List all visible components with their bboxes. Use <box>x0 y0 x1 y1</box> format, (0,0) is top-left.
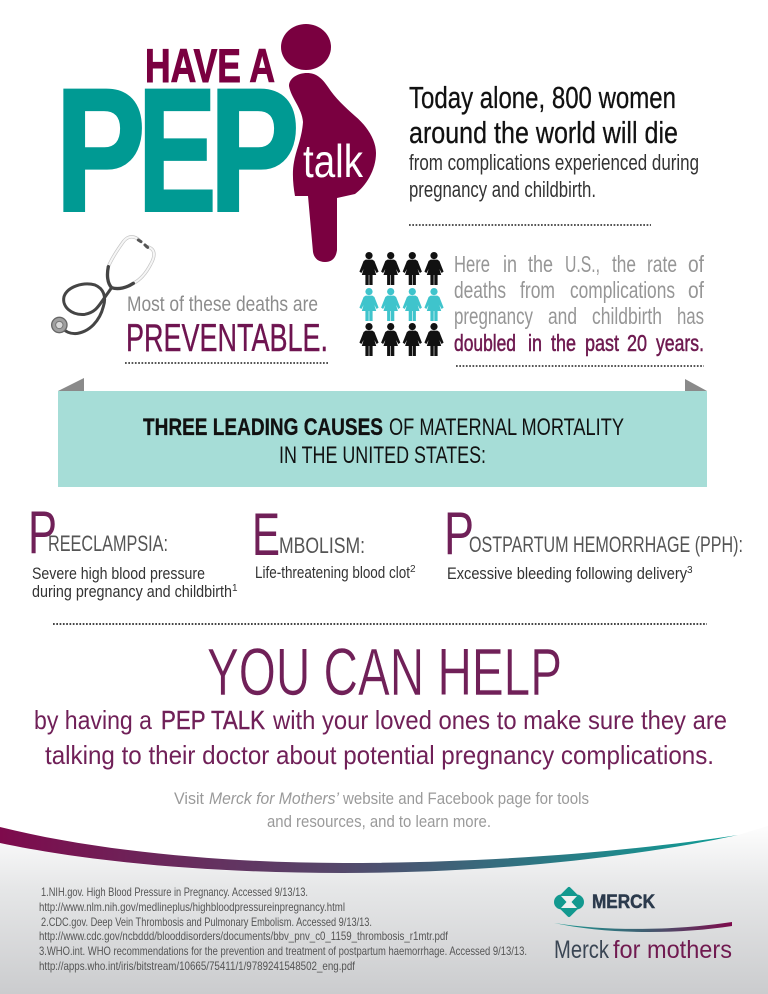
text block: visit merck for mothers: and resources, and to learn more. <box>267 812 491 831</box>
text block: today alone: around the world will die <box>409 115 678 150</box>
logo word: pep: P <box>56 54 145 249</box>
icon: pregnant woman <box>281 24 376 262</box>
cause: preeclampsia: REECLAMPSIA: <box>48 531 168 556</box>
text block: most deaths preventable <box>126 293 328 360</box>
text block: us rate doubled: the <box>551 330 576 356</box>
logo: merck <box>554 889 732 964</box>
text block: us rate doubled: rate <box>647 251 677 277</box>
cause: embolism: MBOLISM: <box>279 533 365 558</box>
logo word: pep: E <box>138 52 216 248</box>
wordmark: merck for mothers: Merck <box>554 936 609 964</box>
text block: us rate doubled: 20 <box>627 330 647 356</box>
text block: pep talk message <box>34 705 727 770</box>
text block: us rate doubled: of <box>688 251 705 277</box>
banner: three leading causes <box>58 378 707 487</box>
cause: postpartum hemorrhage: 3 <box>687 565 693 576</box>
text block: today alone <box>409 80 699 202</box>
text block: us rate doubled: U.S., <box>565 251 600 277</box>
references: 1.NIH.gov. High Blood Pressure in Pregnancy. Accessed 9/13/13. <box>41 885 308 899</box>
text block: most deaths preventable: PREVENTABLE. <box>126 317 328 360</box>
text block: visit merck for mothers: Visit <box>174 789 204 808</box>
text block: us rate doubled: the <box>612 251 636 277</box>
banner heading: OF MATERNAL MORTALITY <box>389 414 624 441</box>
cause: preeclampsia <box>28 499 238 601</box>
text block: us rate doubled: childbirth <box>592 303 662 329</box>
references: http://www.nlm.nih.gov/medlineplus/highbloodpressureinpregnancy.html <box>39 900 345 914</box>
references: 2.CDC.gov. Deep Vein Thrombosis and Pulmonary Embolism. Accessed 9/13/13. <box>41 915 372 929</box>
text block: us rate doubled: past <box>585 330 619 356</box>
logo heading: have a: HAVE A <box>145 39 275 92</box>
icon: merck mark <box>554 889 584 915</box>
text block: pep talk message: PEP TALK <box>161 705 266 735</box>
references <box>39 885 527 973</box>
text block: us rate doubled <box>454 251 705 356</box>
cause: preeclampsia: 1 <box>232 583 238 594</box>
swoosh <box>0 827 738 873</box>
logo word: talk: talk <box>303 135 364 187</box>
logo word: pep <box>56 52 299 249</box>
banner heading: THREE LEADING CAUSES <box>143 414 383 441</box>
text block: us rate doubled: has <box>677 303 704 329</box>
text block: us rate doubled: pregnancy <box>454 303 533 329</box>
wordmark: merck for mothers <box>554 936 732 964</box>
references: 3.WHO.int. WHO recommendations for the prevention and treatment of postpartum haemorrhage. Accessed 9/13/13. <box>39 944 527 958</box>
text block: today alone: Today alone, 800 women <box>409 80 676 115</box>
text block: us rate doubled: in <box>528 330 542 356</box>
cause: postpartum hemorrhage: Excessive bleeding following delivery <box>447 564 687 583</box>
text block: visit merck for mothers: website and Facebook page for tools <box>342 789 589 808</box>
text block: us rate doubled: deaths <box>454 277 506 303</box>
text block: us rate doubled: the <box>528 251 553 277</box>
references: http://www.cdc.gov/ncbddd/blooddisorders/documents/bbv_pnv_c0_1159_thrombosis_r1mtr.pdf <box>39 929 449 943</box>
icon: stethoscope <box>52 237 154 334</box>
references: http://apps.who.int/iris/bitstream/10665/75411/1/9789241548502_eng.pdf <box>39 959 356 973</box>
footer grey background <box>0 826 768 994</box>
cause: postpartum hemorrhage: P <box>444 500 474 567</box>
logo: merck: MERCK <box>592 892 655 913</box>
text block: today alone: pregnancy and childbirth. <box>409 177 596 202</box>
cause: embolism <box>252 501 416 582</box>
text block: most deaths preventable: Most of these deaths are <box>127 293 318 316</box>
text block: pep talk message: with your loved ones to make sure they are <box>272 705 727 735</box>
cause: preeclampsia: P <box>28 499 57 566</box>
text block: us rate doubled: complications <box>570 277 675 303</box>
logo word: pep: P <box>210 54 299 249</box>
text block: us rate doubled: in <box>503 251 517 277</box>
text block: us rate doubled: doubled <box>454 330 516 356</box>
banner heading: IN THE UNITED STATES: <box>279 442 486 469</box>
text block: pep talk message: by having a <box>34 705 152 735</box>
wordmark: merck for mothers: for mothers <box>613 936 732 964</box>
icon grid: twelve women <box>359 252 444 356</box>
merck for mothers swoosh <box>554 922 732 932</box>
text block: pep talk message: talking to their doctor about potential pregnancy complications. <box>45 740 714 770</box>
banner heading <box>143 414 624 469</box>
cause: embolism: E <box>252 501 280 568</box>
cause: embolism: Life-threatening blood clot <box>255 563 410 582</box>
text block: us rate doubled: from <box>520 277 555 303</box>
text block: us rate doubled: of <box>688 277 705 303</box>
text block: visit merck for mothers <box>174 789 589 831</box>
cause: postpartum hemorrhage <box>444 500 743 583</box>
logo: have a pep talk <box>56 24 376 262</box>
cause: preeclampsia: Severe high blood pressure <box>32 564 205 583</box>
text block: us rate doubled: years. <box>656 330 704 356</box>
text block: us rate doubled: Here <box>454 251 490 277</box>
text block: visit merck for mothers: Merck for Mothers’ <box>209 789 339 808</box>
cause: preeclampsia: during pregnancy and childbirth <box>32 582 232 601</box>
heading: you can help: YOU CAN HELP <box>207 635 562 710</box>
text block: us rate doubled: and <box>548 303 577 329</box>
cause: embolism: 2 <box>410 564 416 575</box>
